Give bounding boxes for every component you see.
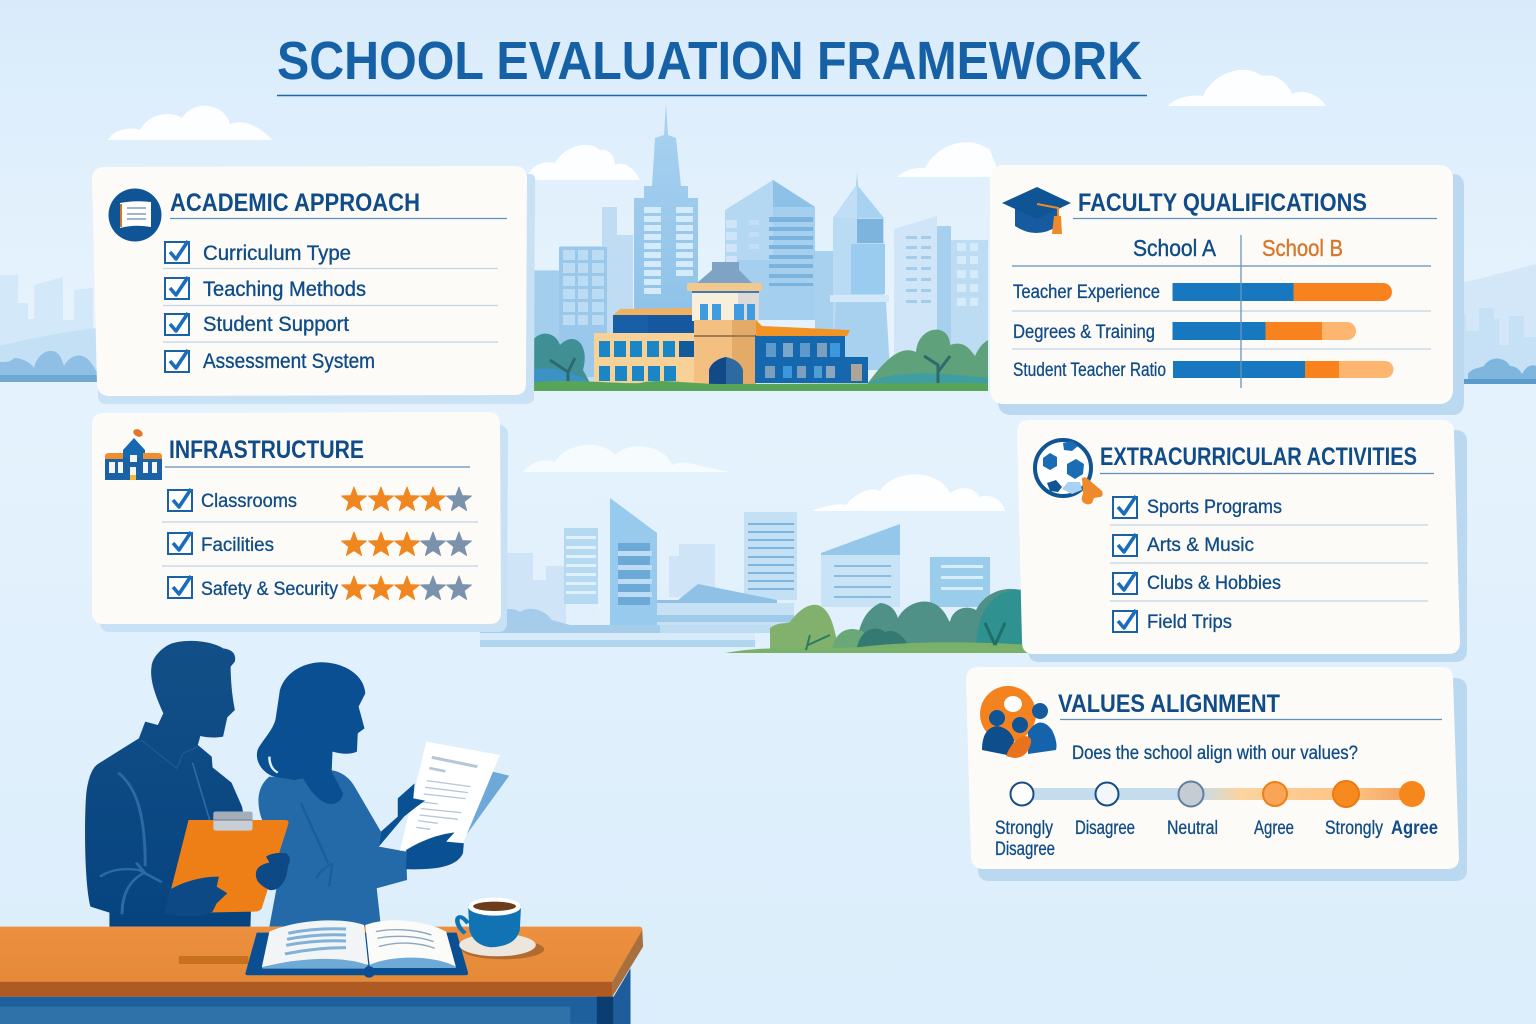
lower trees [725, 589, 1034, 653]
comparison bar chart: School A [1133, 235, 1217, 261]
rated checklist [162, 487, 478, 600]
icon: open book badge [108, 188, 162, 242]
man hands [165, 853, 290, 916]
checklist: Arts & Music [1147, 535, 1254, 556]
desk [0, 927, 643, 1024]
heading: EXTRACURRICULAR ACTIVITIES [1100, 443, 1417, 471]
question: Does the school align with our values? [1072, 743, 1358, 764]
checklist: Curriculum Type [203, 242, 351, 265]
rating scale [995, 781, 1438, 860]
checklist: Clubs & Hobbies [1147, 573, 1281, 594]
heading: VALUES ALIGNMENT [1058, 690, 1280, 718]
panel: extracurricular activities [1017, 420, 1467, 662]
rating scale: Disagree [995, 839, 1055, 860]
lower city skyline [480, 493, 990, 647]
panel: faculty qualifications [990, 165, 1464, 415]
rating scale: Strongly [995, 818, 1053, 839]
distant skyline left [0, 275, 97, 382]
checklist: Student Support [203, 313, 349, 336]
comparison bar chart: Teacher Experience [1013, 282, 1160, 303]
ground strip [527, 381, 988, 391]
paper document [400, 742, 500, 851]
checklist: Field Trips [1147, 612, 1232, 633]
icon: soccer ball with cursor [1035, 440, 1103, 504]
rating scale: Agree [1254, 818, 1294, 839]
comparison bar chart: School B [1262, 235, 1343, 261]
icon: school building [105, 428, 162, 480]
rating scale: Strongly [1325, 818, 1383, 839]
checklist: Assessment System [203, 350, 375, 373]
rating scale: Agree [1391, 818, 1438, 839]
school building [594, 262, 868, 385]
distant skyline right [1452, 264, 1536, 384]
checklist [1110, 496, 1428, 633]
heading: ACADEMIC APPROACH [170, 189, 420, 217]
coffee cup [457, 898, 544, 959]
open book [245, 920, 468, 978]
icon: people in orange circle [980, 686, 1056, 758]
comparison bar chart [1012, 235, 1431, 388]
comparison bar chart: Degrees & Training [1013, 322, 1155, 343]
people and desk illustration [0, 641, 643, 1024]
heading: FACULTY QUALIFICATIONS [1078, 189, 1367, 217]
panel: infrastructure [92, 412, 508, 632]
heading: INFRASTRUCTURE [169, 436, 364, 464]
checklist [163, 241, 498, 373]
panel: values alignment [966, 667, 1467, 881]
rated checklist: Classrooms [201, 491, 297, 512]
panel: academic approach [92, 166, 535, 404]
woman hands [379, 783, 464, 869]
city skyline behind school [527, 103, 988, 391]
man silhouette [85, 641, 253, 927]
rating scale: Neutral [1167, 818, 1218, 839]
back sheet of paper [446, 772, 509, 843]
trees around school [527, 330, 988, 388]
rated checklist: Facilities [201, 535, 274, 556]
clouds [108, 70, 1326, 511]
icon: graduation cap [1002, 187, 1071, 234]
checklist: Teaching Methods [203, 278, 366, 301]
checklist: Sports Programs [1147, 497, 1282, 518]
title: SCHOOL EVALUATION FRAMEWORK [277, 31, 1142, 91]
orange clipboard [165, 812, 289, 913]
woman silhouette [257, 662, 407, 927]
rated checklist: Safety & Security [201, 579, 338, 600]
rating scale: Disagree [1075, 818, 1135, 839]
comparison bar chart: Student Teacher Ratio [1013, 360, 1166, 381]
